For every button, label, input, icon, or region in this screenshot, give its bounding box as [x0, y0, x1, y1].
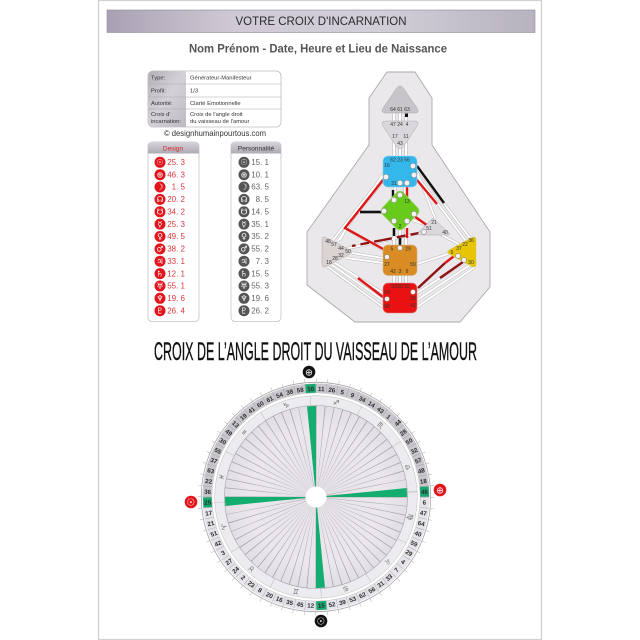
zodiac signs: ♌ — [382, 556, 392, 566]
zodiac signs: ♐ — [332, 399, 340, 408]
icons: personality planets — [238, 157, 250, 316]
icon: left red marker — [185, 496, 197, 508]
channels: active red and black — [345, 166, 463, 297]
icons: personality planets: ♂ — [240, 245, 248, 254]
values: design: 26. 4 — [167, 306, 186, 315]
gate numbers: 56 — [367, 586, 377, 596]
gate numbers: 8 — [257, 587, 264, 595]
center: ajna — [382, 121, 418, 148]
icon: bottom black marker — [315, 615, 327, 628]
panel: profile table: Générateur-Manifesteur — [190, 76, 252, 82]
gate numbers: 12 — [307, 603, 315, 610]
center: throat: 56 — [404, 158, 410, 164]
gate numbers: 30 — [218, 437, 228, 447]
gate numbers: 53 — [348, 595, 358, 604]
icons: design planets: ♆ — [156, 294, 164, 303]
center: spleen: 50 — [345, 249, 351, 255]
panel: profile table: Croix de l'angle droit — [190, 112, 243, 118]
values: personality: 15. 1 — [251, 158, 270, 167]
center: throat: 23 — [397, 158, 403, 164]
center: spleen: 48 — [325, 239, 331, 245]
gate numbers: 5 — [340, 389, 345, 397]
panel: personality column — [231, 142, 281, 322]
channels: white — [328, 113, 475, 307]
center: G: 2 — [399, 224, 402, 230]
icon: bottom black marker: ☉ — [317, 616, 325, 628]
center: root: 39 — [410, 296, 416, 302]
center: throat: 31 — [391, 181, 397, 187]
gate numbers: 2 — [239, 574, 247, 582]
center: solar plexus: 6 — [451, 250, 454, 256]
center: spleen: 28 — [332, 256, 338, 262]
icons: personality planets: ♃ — [240, 257, 248, 266]
gate numbers: 37 — [209, 457, 219, 466]
gate numbers: 55 — [213, 447, 223, 456]
icons: design planets: ☋ — [156, 208, 164, 216]
center: head: 64 — [390, 107, 396, 113]
center: solar plexus: 30 — [468, 260, 474, 266]
zodiac signs: ♈ — [220, 522, 229, 531]
gate numbers: 3 — [220, 549, 227, 557]
gate numbers: 62 — [358, 591, 368, 600]
gate numbers: 50 — [405, 437, 415, 447]
gate numbers: 14 — [367, 400, 376, 410]
values: design: 12. 1 — [167, 269, 186, 278]
panel: personality column: Personnalité — [238, 146, 274, 152]
center: spleen: 44 — [338, 246, 344, 252]
center: spleen: 32 — [338, 253, 344, 259]
icons: personality planets: ☊ — [240, 195, 248, 204]
icon: left red marker: ☉ — [187, 498, 195, 508]
inner gap rings — [212, 393, 420, 601]
gate numbers: 1 — [385, 414, 392, 421]
panel: profile table: Clarté Emotionnelle — [190, 101, 241, 107]
gate numbers: 49 — [224, 428, 234, 438]
gate numbers: 44 — [394, 418, 404, 428]
center: ajna: 24 — [397, 122, 403, 128]
gate numbers: 26 — [328, 387, 336, 395]
panel: design column — [148, 142, 199, 322]
values: personality: 8. 5 — [256, 195, 270, 204]
zodiac signs: ♏ — [375, 421, 386, 431]
gate ring: lower half — [207, 497, 425, 606]
center: solar plexus: 37 — [456, 246, 462, 252]
gate numbers: 15 — [318, 602, 326, 610]
values: design: 34. 2 — [167, 208, 186, 216]
center: heart: 21 — [431, 220, 437, 226]
zodiac signs: ♍ — [405, 513, 414, 522]
values: design: 20. 2 — [167, 195, 186, 204]
center: solar plexus — [448, 237, 476, 267]
gate numbers: 35 — [285, 599, 294, 607]
icon: top black marker — [303, 366, 315, 378]
gate numbers — [204, 386, 429, 610]
center: throat: 16 — [384, 163, 390, 169]
center: head: 63 — [404, 107, 410, 113]
values: personality: 35. 1 — [251, 220, 270, 229]
zodiac signs — [218, 399, 414, 595]
zodiac signs: ♊ — [292, 586, 300, 595]
values: design: 25. 3 — [167, 158, 186, 167]
icons: personality planets: ♄ — [240, 269, 248, 278]
center: spleen — [322, 237, 352, 267]
gate numbers: 39 — [338, 599, 347, 607]
gate numbers: 47 — [419, 510, 428, 518]
zodiac ring — [220, 400, 412, 594]
gate numbers: 38 — [286, 388, 295, 397]
panel: profile table: 1/3 — [190, 88, 198, 94]
values: design — [167, 158, 186, 315]
values: design: 19. 6 — [167, 294, 186, 303]
center: ajna: 47 — [390, 122, 396, 128]
zodiac signs: ♋ — [341, 584, 350, 593]
gate numbers: 33 — [385, 573, 395, 583]
center: root: 41 — [410, 303, 416, 309]
panel: profile table — [148, 71, 281, 127]
center: root: 53 — [391, 284, 397, 290]
icons: design planets: ♂ — [156, 245, 164, 254]
center: ajna: 17 — [392, 134, 398, 140]
icons: design planets: ☉ — [156, 158, 164, 167]
gate numbers: 32 — [410, 446, 420, 456]
center: heart: 51 — [426, 226, 432, 232]
center: ajna: 4 — [406, 122, 409, 128]
values: personality: 63. 5 — [251, 183, 270, 192]
values: personality: 15. 5 — [251, 269, 270, 278]
header banner — [107, 10, 535, 32]
highlighted gates — [203, 384, 429, 610]
icons: personality planets: ♀ — [241, 232, 247, 241]
gate numbers: 59 — [409, 539, 419, 549]
gate numbers: 51 — [210, 530, 219, 539]
values: personality: 26. 2 — [251, 306, 270, 315]
center: root — [383, 283, 417, 313]
gate numbers: 40 — [413, 530, 423, 539]
icon: right red marker — [434, 484, 446, 496]
center: root: 58 — [384, 304, 390, 310]
center: heart: 40 — [442, 230, 448, 236]
values: personality: 14. 5 — [251, 208, 270, 216]
icons: personality planets: ☋ — [240, 208, 248, 216]
icons: design planets: ♀ — [157, 232, 163, 241]
header banner: VOTRE CROIX D'INCARNATION — [236, 14, 406, 28]
inner disc — [224, 406, 408, 588]
zodiac signs: ♎ — [403, 463, 412, 472]
gate numbers: 7 — [393, 566, 401, 574]
center: root: 54 — [384, 290, 390, 296]
center: solar plexus: 22 — [462, 242, 468, 248]
gate numbers: 43 — [375, 406, 385, 416]
chart: mandala wheel — [200, 380, 432, 614]
gate numbers: 42 — [214, 539, 223, 549]
panel: design column: Design — [163, 146, 184, 152]
center: sacral: 29 — [405, 246, 411, 252]
icons: personality planets: ♅ — [240, 282, 248, 291]
subtitle: Nom Prénom - Date, Heure et Lieu de Naissance — [189, 42, 447, 56]
center: sacral: 27 — [384, 262, 390, 268]
gate numbers: 22 — [205, 478, 213, 486]
gate numbers: 29 — [404, 549, 414, 559]
gate numbers: 11 — [318, 386, 325, 393]
values: personality: 7. 3 — [256, 257, 270, 266]
page frame — [98, 0, 542, 640]
gate numbers: 52 — [328, 601, 337, 609]
center: head — [382, 86, 418, 117]
zodiac signs: ♓ — [218, 473, 227, 481]
center: sacral: 42 — [390, 269, 396, 275]
center: G: 13 — [404, 199, 410, 205]
gate numbers: 27 — [224, 557, 235, 567]
center: sacral: 5 — [391, 246, 394, 252]
icon: top black marker: ⊕ — [305, 368, 313, 378]
gate numbers: 48 — [417, 467, 426, 476]
gate numbers: 13 — [230, 420, 240, 430]
icons: personality planets: ☿ — [242, 220, 246, 229]
gate numbers: 31 — [376, 580, 386, 590]
center: root: 60 — [397, 284, 403, 290]
icon: right red marker: ⊕ — [436, 486, 444, 496]
bodygraph silhouette — [307, 72, 490, 322]
gate numbers: 23 — [246, 580, 256, 590]
icons: design planets: ☊ — [156, 195, 164, 204]
gate numbers: 6 — [422, 500, 427, 507]
panel: profile table: Croix d' — [151, 112, 170, 118]
zodiac signs: ♉ — [247, 563, 257, 573]
center: sacral: 59 — [410, 262, 416, 268]
gate numbers: 36 — [204, 489, 212, 496]
gate numbers: 20 — [265, 591, 274, 601]
center: spleen: 18 — [326, 260, 332, 266]
values: design: 38. 2 — [167, 245, 186, 254]
center: sacral: 3 — [399, 269, 402, 275]
center: ajna: 11 — [403, 134, 409, 140]
values: design: 55. 1 — [167, 282, 186, 291]
panel: profile table: Profil: — [151, 88, 166, 94]
panel: profile table: incarnation: — [151, 119, 181, 125]
center: throat: 62 — [390, 158, 396, 164]
icons: personality planets: ⊕ — [241, 170, 247, 179]
gate numbers: 58 — [296, 387, 305, 395]
zodiac signs: ♑ — [282, 401, 291, 410]
values: personality: 55. 2 — [251, 245, 270, 254]
gate numbers: 63 — [206, 467, 215, 476]
values: personality: 19. 6 — [251, 294, 270, 303]
icons: personality planets: ♇ — [240, 306, 248, 315]
radial lines — [265, 446, 367, 548]
gate ring: upper half — [207, 388, 425, 497]
values: personality: 10. 1 — [251, 170, 270, 179]
gate numbers: 34 — [357, 395, 367, 405]
center: solar plexus: 36 — [468, 238, 474, 244]
values: design: 1. 5 — [172, 183, 186, 192]
values: design: 25. 3 — [167, 220, 186, 229]
zodiac separators — [215, 396, 417, 598]
gate numbers: 16 — [275, 595, 284, 605]
center: sacral: 9 — [406, 269, 409, 275]
center: spleen: 57 — [331, 242, 337, 248]
center: sacral — [383, 245, 417, 276]
gate numbers: 57 — [414, 457, 423, 466]
center: G — [381, 191, 419, 230]
panel: profile table: Type: — [151, 76, 166, 82]
icons: design planets: ♇ — [156, 306, 164, 315]
gate numbers: 64 — [417, 520, 426, 529]
gate numbers: 24 — [231, 565, 241, 575]
center hole — [306, 486, 326, 508]
gate numbers: 19 — [239, 412, 249, 422]
icons: personality planets: ☽ — [240, 183, 248, 192]
gate numbers: 28 — [399, 428, 409, 438]
panel: profile table: du vaisseau de l'amour — [190, 119, 250, 125]
panel: profile table: Autorité: — [151, 101, 173, 107]
gate numbers: 41 — [247, 405, 257, 416]
gate numbers: 25 — [204, 499, 212, 507]
gate numbers: 9 — [349, 392, 356, 400]
gate numbers: 10 — [307, 386, 315, 393]
center: throat — [383, 156, 417, 187]
gate numbers: 45 — [296, 601, 304, 609]
icons: personality planets: ♆ — [240, 294, 248, 303]
values: design: 33. 1 — [167, 257, 186, 266]
values: personality: 55. 3 — [251, 282, 270, 291]
icons: design planets: ☿ — [158, 220, 162, 229]
gate numbers: 18 — [420, 478, 428, 486]
gate separators — [207, 388, 425, 606]
copyright line: © designhumainpourtous.com — [164, 129, 266, 138]
icons: design planets: ♄ — [156, 269, 164, 278]
icons: design planets: ⊕ — [157, 170, 163, 179]
zodiac ring border — [215, 396, 417, 598]
zodiac signs: ♒ — [240, 428, 250, 438]
gate numbers: 60 — [256, 400, 266, 410]
center: ajna: 43 — [397, 141, 403, 147]
green wedges — [225, 406, 407, 588]
icons: personality planets: ☉ — [240, 158, 248, 167]
gate numbers: 61 — [265, 395, 275, 404]
center: head: 61 — [397, 107, 403, 113]
values: personality: 35. 2 — [251, 232, 270, 241]
outer ticks — [200, 380, 432, 614]
outer ring line — [201, 382, 431, 612]
values: design: 46. 3 — [167, 170, 186, 179]
gate numbers: 4 — [399, 558, 407, 566]
values: personality — [251, 158, 270, 315]
gate numbers: 17 — [205, 510, 213, 518]
gate numbers: 54 — [275, 391, 285, 400]
icons: design planets: ♃ — [156, 257, 164, 266]
values: design: 49. 5 — [167, 232, 186, 241]
chart: bodygraph — [307, 72, 490, 322]
gate numbers: 21 — [207, 520, 216, 528]
icons: design planets: ♅ — [156, 282, 164, 291]
icons: design planets — [154, 157, 166, 316]
gate numbers: 46 — [421, 489, 429, 496]
center: heart — [418, 218, 450, 236]
icons: design planets: ☽ — [156, 183, 164, 192]
center: root: 52 — [404, 284, 410, 290]
